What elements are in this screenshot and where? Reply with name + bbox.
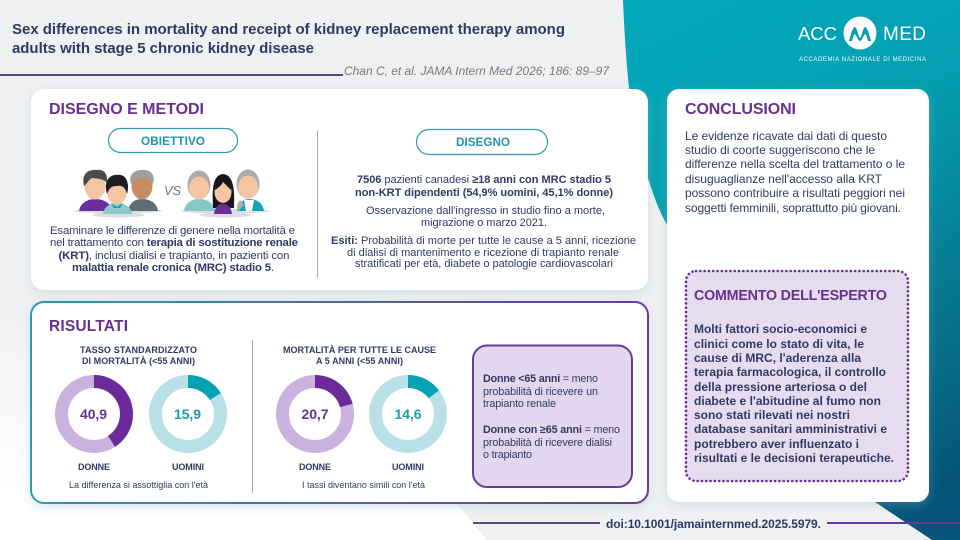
text: design: Esiti: Probabilità di morte per tutte le cause a 5 anni, ricezione [331,235,636,247]
text: vs: VS [164,183,181,198]
text: design: Osservazione dall'ingresso in studio fino a morte, [366,205,605,217]
panel: disegno e metodi [31,89,648,290]
text: design: migrazione o marzo 2021. [421,217,547,229]
pill: obiettivo [108,128,238,152]
text: commento: diabete e l'abitudine al fumo non [694,394,881,408]
text: objective [50,225,298,274]
pill: disegno: DISEGNO [456,136,510,149]
heading: disegno e metodi: DISEGNO E METODI [49,101,204,118]
donut chart: donne 40,9: 40,9 [80,406,107,422]
note: la differenza: La differenza si assottiglia con l'età [69,480,208,490]
label: uomini: UOMINI [392,462,424,472]
heading: commento: COMMENTO DELL'ESPERTO [694,288,887,304]
text: conclusions: possono contribuire a risultati peggiori nei [685,186,905,200]
logo: ACC MED: ACC [798,23,837,44]
text: design: di dialisi di mantenimento e ricezione di trapianto renale [347,247,619,259]
callout: donne: probabilità di ricevere un [483,386,598,398]
chart heading: mortalita 5 anni [283,345,436,366]
chart heading: tasso standardizzato [80,345,197,366]
title: Sex differences in mortality and receipt of kidney replacement therapy among [12,21,565,38]
callout: donne: Donne con ≥65 anni = meno [483,424,620,436]
text: commento: della pressione arteriosa o del [694,380,867,394]
text: commento: cause di MRC, l'aderenza alla [694,351,861,365]
logo: ACC MED: ACCADEMIA NAZIONALE DI MEDICINA [799,57,926,63]
label: donne: DONNE [78,462,110,472]
text: commento: terapia farmacologica, il controllo [694,365,886,379]
callout: donne: o trapianto [483,449,532,461]
heading: conclusioni: CONCLUSIONI [685,101,796,118]
text: commento [694,322,894,465]
donut chart: uomini 15,9: 15,9 [174,406,201,422]
panel: risultati [31,302,648,503]
icon: group of women [181,170,269,218]
text: objective: (KRT), inclusi dialisi e trapianto, in pazienti con [58,250,290,262]
donut chart: donne 20,7: 20,7 [302,406,329,422]
donut chart: donne 40,9 [62,382,126,446]
chart heading: tasso standardizzato: TASSO STANDARDIZZATO [80,345,197,355]
text: commento: database sanitari amministrativi e [694,422,887,436]
logo: ACC MED [798,16,926,63]
box: commento dell'esperto [686,271,908,481]
icon: group of men [74,170,162,218]
title [12,21,565,57]
callout: donne: probabilità di ricevere dialisi [483,437,612,449]
doi footer: doi:10.1001/jamainternmed.2025.5979. [606,517,821,531]
donut chart: uomini 14,6: 14,6 [394,406,422,422]
callout: donne: trapianto renale [483,398,556,410]
text: commento: clinici come lo stato di vita, le [694,337,864,351]
donut chart: uomini 15,9 [156,382,220,446]
chart heading: mortalita 5 anni: MORTALITÀ PER TUTTE LE CAUSE [283,345,436,355]
text: objective: malattia renale cronica (MRC) stadio 5. [72,262,274,274]
text: design: non-KRT dipendenti (54,9% uomini, 45,1% donne) [355,187,613,199]
citation: Chan C, et al. JAMA Intern Med 2026; 186: 89–97 [344,64,610,78]
text: conclusions: Le evidenze ricavate dai dati di questo [685,129,887,143]
text: commento: Molti fattori socio-economici e [694,322,867,336]
logo: ACC MED: MED [883,24,926,45]
text: objective: nel trattamento con terapia di sostituzione renale [50,237,298,249]
pill: obiettivo: OBIETTIVO [141,135,205,148]
text: conclusions: soggetti femminili, soprattutto più giovani. [685,201,901,215]
text: conclusions [685,129,905,215]
text: conclusions: disuguaglianze nell'accesso alla KRT [685,172,883,186]
pill: disegno [416,130,548,154]
chart heading: mortalita 5 anni: A 5 ANNI (<55 ANNI) [316,356,403,366]
callout: donne: Donne <65 anni = meno [483,373,598,385]
text: design [331,174,636,270]
text: commento: sono stati rilevati nei nostri [694,408,850,422]
label: uomini: UOMINI [172,462,204,472]
text: conclusions: differenze nella scelta del trattamento o le [685,157,905,171]
text: commento: potrebbero aver influenzato i [694,437,859,451]
text: conclusions: studio di coorte suggeriscono che le [685,143,875,157]
text: design: 7506 pazienti canadesi ≥18 anni con MRC stadio 5 [357,174,611,186]
panel: conclusioni [667,89,929,502]
text: objective: Esaminare le differenze di genere nella mortalità e [50,225,295,237]
text: commento: risultati e le decisioni terapeutiche. [694,451,894,465]
title: adults with stage 5 chronic kidney disease [12,40,314,57]
heading: risultati: RISULTATI [49,318,128,335]
note: i tassi: I tassi diventano simili con l'età [302,480,425,490]
label: donne: DONNE [299,462,331,472]
donut chart: donne 20,7 [282,382,348,446]
chart heading: tasso standardizzato: DI MORTALITÀ (<55 ANNI) [82,356,195,366]
text: design: stratificati per età, diabete o patologie cardiovascolari [355,258,613,270]
donut chart: uomini 14,6 [376,382,440,446]
callout: donne [473,346,632,487]
